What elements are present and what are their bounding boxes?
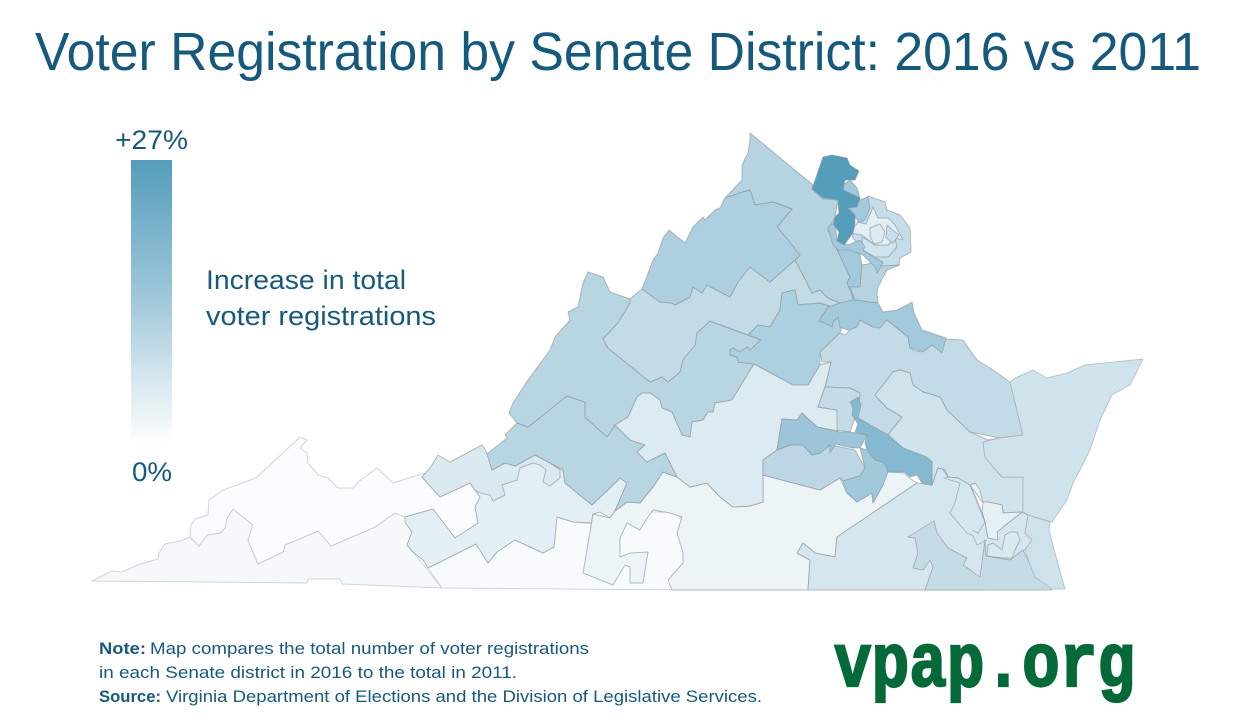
- district: Arlington and Alexandria: [850, 207, 903, 245]
- district: Peninsula strip: [942, 468, 987, 545]
- legend max label: +27%: [115, 125, 188, 155]
- district: Northern Neck and Eastern Shore: [983, 359, 1143, 522]
- district: New Kent: [875, 370, 1023, 513]
- district: Harrisonburg: [642, 190, 800, 305]
- district: Annandale: [870, 224, 885, 244]
- district: New River: [405, 455, 627, 568]
- footnote: Source:: [99, 687, 161, 706]
- footnote: Virginia Department of Elections and the Division of Legislative Services.: [166, 687, 762, 706]
- district: southern border: [428, 512, 690, 590]
- district: Roanoke north and Lynchburg: [509, 272, 761, 437]
- district: central Piedmont: [820, 320, 1023, 438]
- district: Chesapeake: [908, 521, 1052, 590]
- district: Stafford: [850, 263, 899, 303]
- district: Loudoun, highest increase: [812, 155, 860, 245]
- district: Virginia Beach: [1025, 515, 1065, 589]
- district: Prince William: [828, 222, 883, 273]
- district: McLean: [886, 225, 899, 243]
- district: Goochland: [818, 387, 860, 432]
- logo: vpap.org: vpap.org: [834, 623, 1135, 709]
- district: Southside upper: [615, 362, 838, 507]
- district: Fredericksburg: [819, 245, 946, 353]
- district: southside lower: [583, 472, 917, 590]
- district: Norfolk: [987, 532, 1020, 558]
- district: Sterling: [843, 180, 860, 198]
- district: Centreville: [848, 197, 870, 222]
- district: Pulaski: [422, 445, 560, 501]
- district: Suffolk: [797, 468, 1032, 590]
- footnote: Note:: [99, 639, 146, 658]
- district: Charlottesville: [730, 290, 842, 385]
- legend description: voter registrations: [206, 301, 436, 331]
- district: Powhatan: [777, 413, 867, 455]
- district: Roanoke south: [487, 396, 677, 511]
- title: Voter Registration by Senate District: 2016 vs 2011: [35, 22, 1201, 82]
- legend gradient bar: [131, 160, 172, 446]
- footnote: in each Senate district in 2016 to the total in 2011.: [99, 663, 517, 682]
- district: Fairfax south: [862, 237, 897, 257]
- legend description: Increase in total: [206, 265, 406, 295]
- district: outer Fairfax: [852, 196, 911, 268]
- footnote: Map compares the total number of voter registrations: [150, 639, 589, 658]
- map of Virginia senate districts: [92, 133, 1143, 590]
- district: Petersburg: [843, 448, 888, 503]
- district: Richmond: [850, 397, 932, 485]
- district: southwest highlands: [190, 437, 480, 564]
- district: James River strip: [970, 485, 985, 533]
- district: Newport News: [970, 483, 1022, 540]
- legend min label: 0%: [132, 457, 172, 487]
- legend: [115, 125, 436, 487]
- district: northern valley: [725, 133, 855, 303]
- district: Farmville: [763, 445, 865, 490]
- district: Shenandoah ridge: [603, 260, 840, 382]
- district: far southwest: [92, 509, 442, 588]
